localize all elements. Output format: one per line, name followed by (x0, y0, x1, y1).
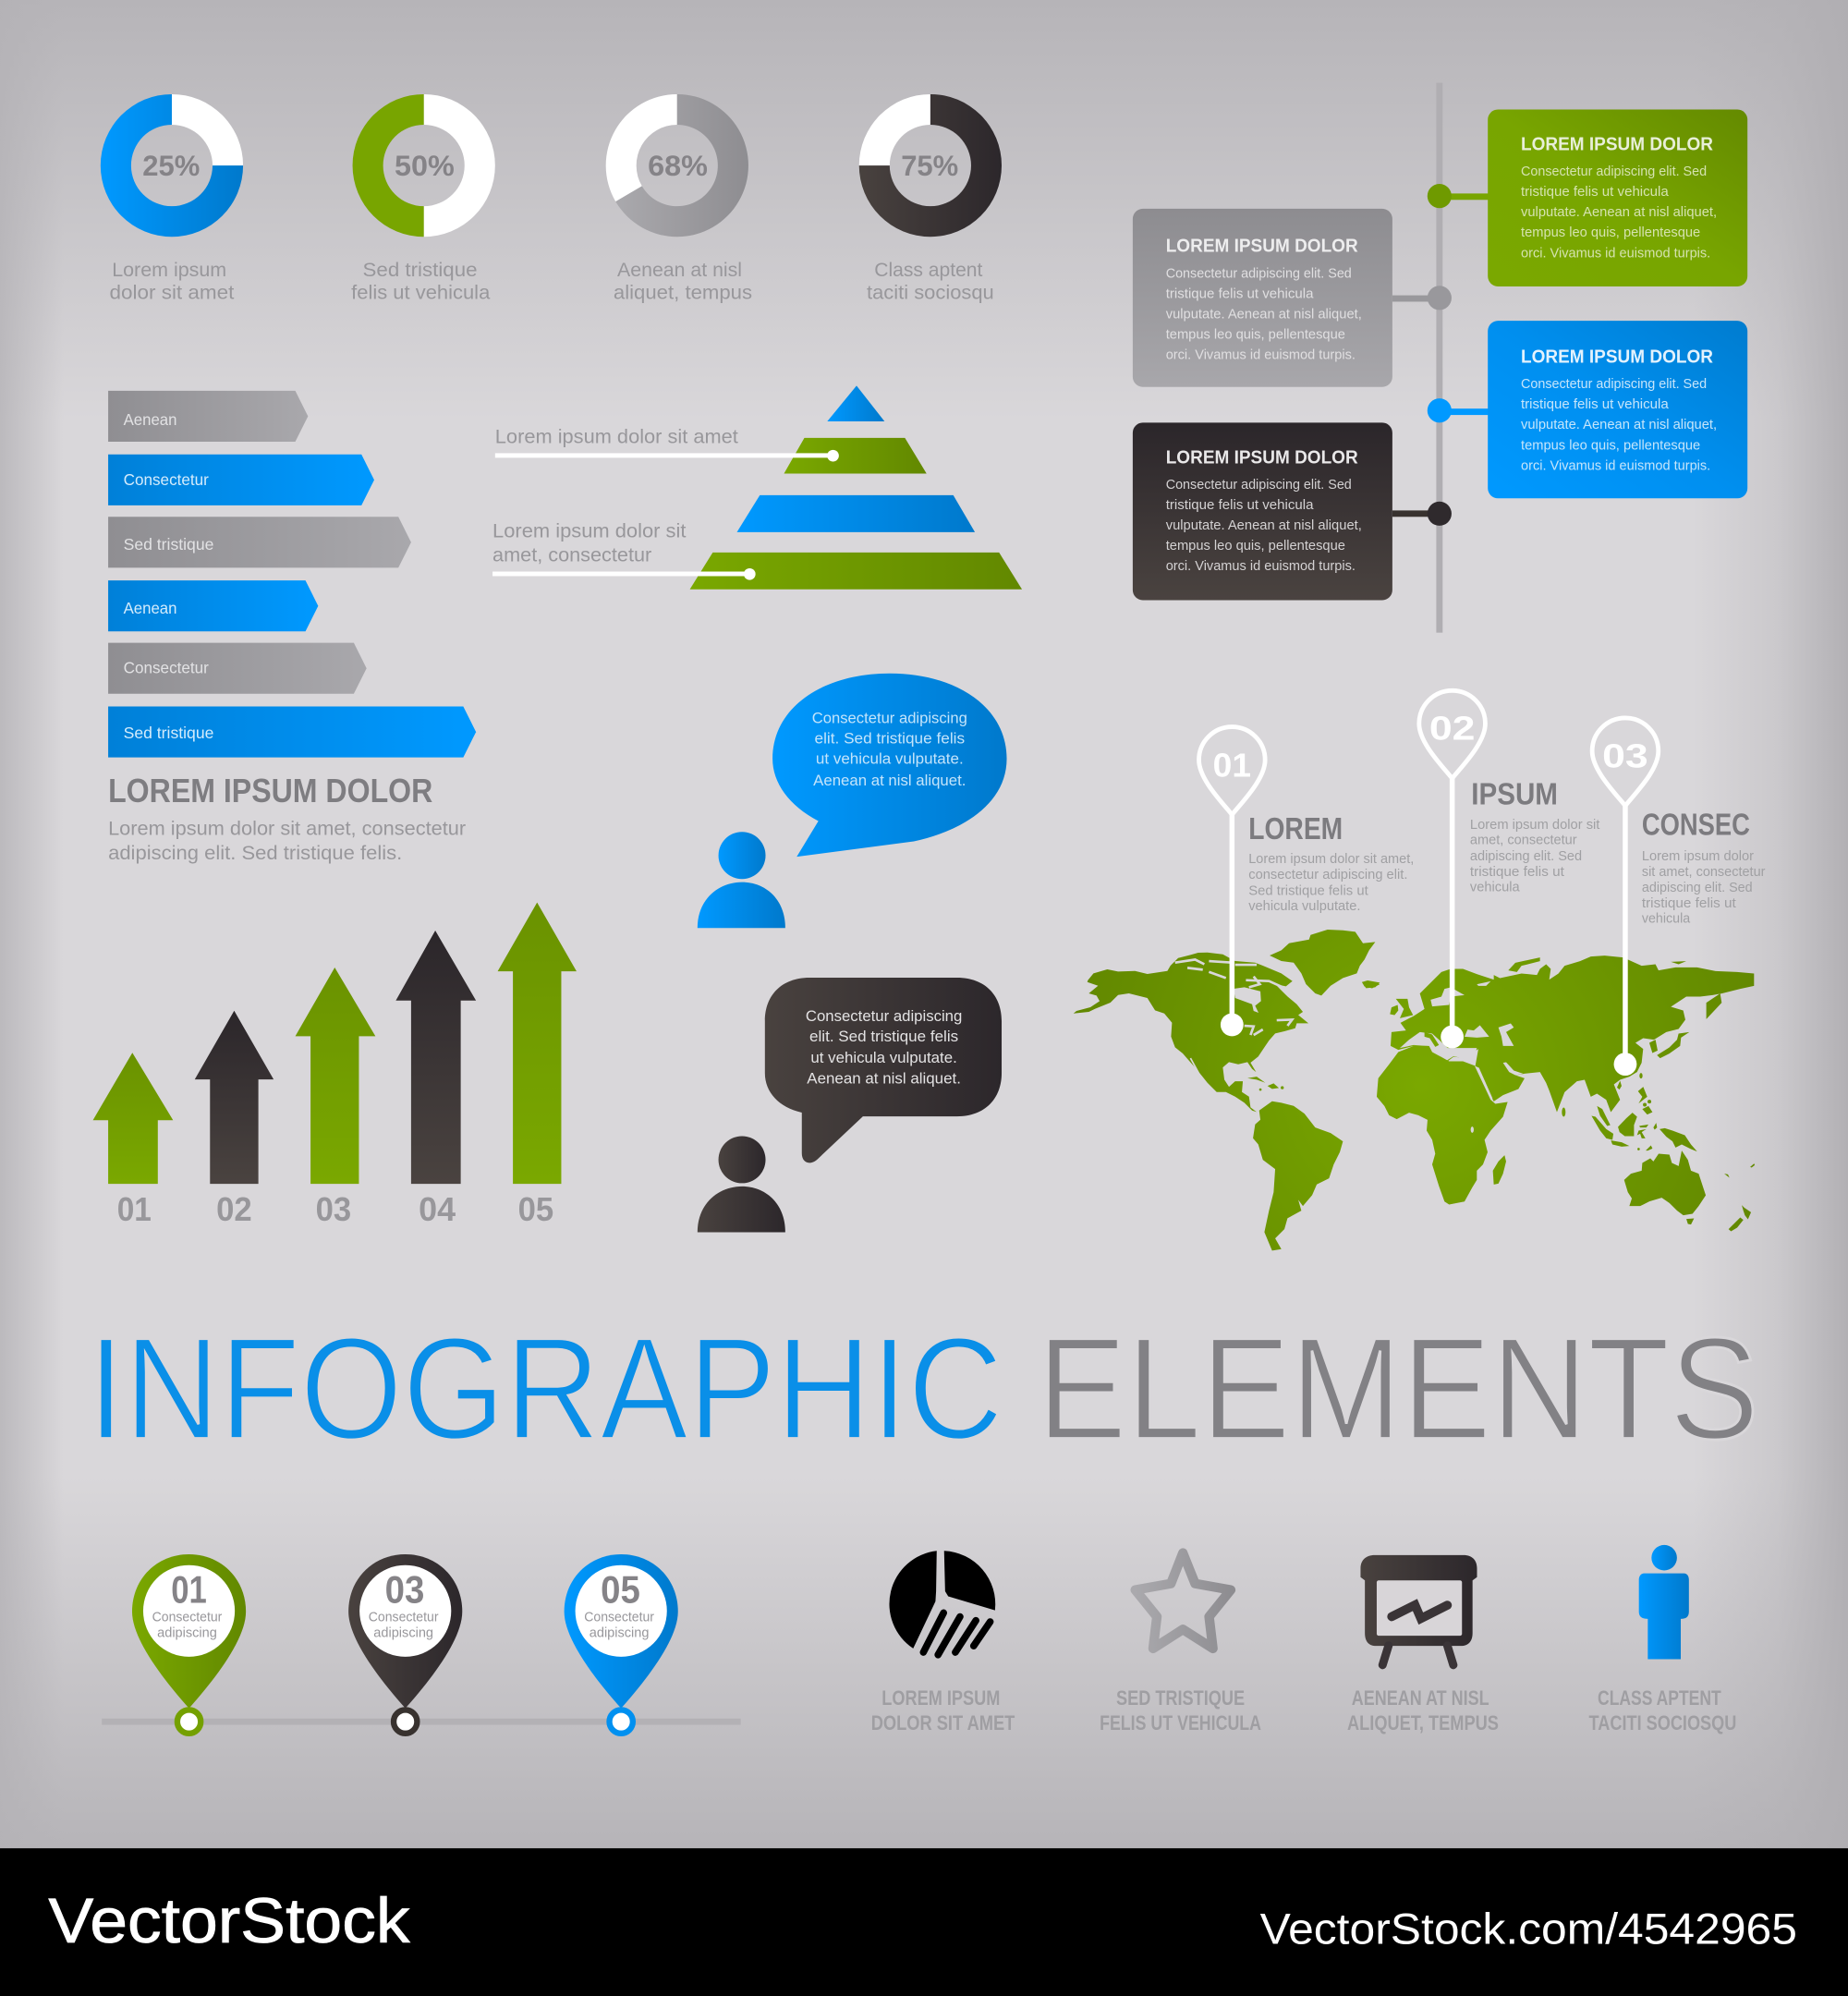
icon labels: ALIQUET, TEMPUS (1347, 1711, 1499, 1734)
pin 05: adipiscing (590, 1625, 649, 1641)
map text IPSUM (1470, 778, 1599, 895)
donut 25%: Lorem ipsum (112, 259, 226, 281)
pin 01: adipiscing (157, 1625, 217, 1641)
timeline box green: tristique felis ut vehicula (1521, 185, 1670, 200)
timeline box green (1428, 109, 1747, 286)
pin 03 (348, 1554, 462, 1734)
arrow 05 (498, 903, 577, 1184)
timeline box green: orci. Vivamus id euismod turpis. (1521, 246, 1710, 261)
panel: speech bubble blue: Consectetur adipiscing (812, 709, 967, 726)
timeline box gray: tristique felis ut vehicula (1166, 286, 1314, 301)
panel: speech bubble dark: ut vehicula vulputate. (810, 1049, 957, 1066)
pyramid callout 2: Lorem ipsum dolor sit (492, 519, 686, 542)
timeline box dark: tristique felis ut vehicula (1166, 498, 1314, 513)
pyramid callout 1 (495, 425, 839, 462)
panel: speech bubble dark: elit. Sed tristique felis (809, 1028, 958, 1045)
icon labels: DOLOR SIT AMET (871, 1711, 1015, 1734)
chart: pyramid (492, 385, 1022, 590)
title: INFOGRAPHIC (88, 1308, 1003, 1470)
donut 25%: dolor sit amet (109, 282, 235, 304)
timeline box blue: orci. Vivamus id euismod turpis. (1521, 458, 1710, 473)
panel: speech bubble dark: Consectetur adipiscing (806, 1007, 962, 1025)
map text CONSEC: sit amet, consectetur (1642, 865, 1766, 880)
donut 50%: felis ut vehicula (351, 282, 490, 304)
ribbon Consectetur gray (108, 643, 367, 694)
map text IPSUM: tristique felis ut (1470, 865, 1564, 880)
ribbon Aenean blue: Aenean (124, 599, 176, 617)
map text IPSUM: adipiscing elit. Sed (1470, 849, 1582, 864)
pin 05: Consectetur (584, 1609, 654, 1625)
icon labels: LOREM IPSUM (881, 1686, 1000, 1710)
timeline box green: LOREM IPSUM DOLOR (1521, 134, 1713, 155)
map pin 03 (1592, 718, 1659, 1076)
panel: speech bubble blue: Aenean at nisl aliquet. (813, 772, 966, 789)
ribbon Aenean gray: Aenean (124, 410, 176, 429)
donut 75%: Class aptent (874, 259, 982, 281)
ribbon Consectetur blue (108, 455, 374, 505)
pin 01: Consectetur (152, 1609, 222, 1625)
timeline box blue: vulputate. Aenean at nisl aliquet, (1521, 418, 1717, 432)
timeline box blue: LOREM IPSUM DOLOR (1521, 347, 1713, 368)
map: eurasia and africa (1362, 955, 1754, 1205)
pyramid callout 2 (492, 519, 756, 580)
timeline box dark: orci. Vivamus id euismod turpis. (1166, 559, 1356, 574)
donut 68%: 68% (648, 149, 708, 182)
donut 50%: Sed tristique (363, 259, 478, 281)
timeline box gray (1133, 209, 1452, 387)
donut 75%: taciti sociosqu (867, 282, 994, 304)
timeline box blue: tristique felis ut vehicula (1521, 397, 1670, 412)
map: americas and greenland (1074, 930, 1380, 1250)
map text IPSUM: IPSUM (1471, 778, 1558, 812)
pin 05 (565, 1554, 678, 1734)
map text LOREM (1248, 812, 1414, 914)
timeline box blue: Consectetur adipiscing elit. Sed (1521, 377, 1707, 392)
icon labels: TACITI SOCIOSQU (1589, 1711, 1736, 1734)
donut 50%: 50% (395, 149, 455, 182)
map text CONSEC: Lorem ipsum dolor (1642, 849, 1754, 864)
ribbon Sed tristique blue (108, 707, 476, 758)
map pin 02 (1419, 690, 1485, 1048)
icon: person figure (1639, 1545, 1689, 1660)
icon: person blue (698, 832, 785, 928)
arrow 04 (395, 931, 476, 1184)
pin 01 (132, 1554, 246, 1734)
donut 50% (351, 94, 495, 304)
icon labels: AENEAN AT NISL (1352, 1686, 1489, 1710)
ribbon Aenean gray (108, 391, 308, 442)
timeline box blue: tempus leo quis, pellentesque (1521, 438, 1700, 453)
arrow 02 (195, 1011, 274, 1184)
timeline box gray: Consectetur adipiscing elit. Sed (1166, 266, 1352, 281)
panel: speech bubble dark (765, 978, 1002, 1162)
timeline box green: tempus leo quis, pellentesque (1521, 225, 1700, 240)
icon: presentation board (1360, 1555, 1477, 1665)
map text LOREM: LOREM (1248, 812, 1343, 846)
icon labels: CLASS APTENT (1598, 1686, 1721, 1710)
map text IPSUM: amet, consectetur (1470, 833, 1577, 847)
title (88, 1308, 1759, 1470)
timeline box dark (1133, 422, 1452, 601)
panel: timeline with boxes (1133, 83, 1747, 633)
pin 03: 03 (385, 1568, 424, 1611)
map text CONSEC: vehicula (1642, 912, 1691, 927)
panel: ribbon bars (108, 391, 476, 758)
footer bar (0, 1848, 1848, 1996)
map text CONSEC (1642, 809, 1766, 927)
panel: donut charts (101, 94, 1002, 304)
arrow numbers: 02 (216, 1191, 252, 1228)
icon labels (871, 1686, 1736, 1734)
map text LOREM: vehicula vulputate. (1248, 899, 1360, 914)
arrow 03 (296, 968, 375, 1184)
title: ELEMENTS (1038, 1308, 1759, 1470)
timeline box dark: Consectetur adipiscing elit. Sed (1166, 478, 1352, 493)
icon: star (1136, 1553, 1231, 1649)
map pin 01: 01 (1213, 747, 1251, 784)
arrow numbers: 04 (419, 1191, 456, 1228)
map text LOREM: Sed tristique felis ut (1248, 883, 1368, 898)
timeline box green: vulputate. Aenean at nisl aliquet, (1521, 205, 1717, 220)
pin 03: Consectetur (369, 1609, 439, 1625)
text block: lorem ipsum dolor: adipiscing elit. Sed tristique felis. (108, 842, 402, 864)
text block: lorem ipsum dolor (108, 773, 466, 864)
donut 68%: aliquet, tempus (614, 282, 752, 304)
world map (1074, 930, 1755, 1250)
timeline box gray: vulputate. Aenean at nisl aliquet, (1166, 307, 1362, 322)
map text LOREM: Lorem ipsum dolor sit amet, (1248, 852, 1414, 867)
arrow numbers: 01 (117, 1191, 152, 1228)
timeline box dark: tempus leo quis, pellentesque (1166, 539, 1345, 554)
arrow 01 (93, 1053, 173, 1184)
footer bar: VectorStock.com/4542965 (1260, 1905, 1797, 1953)
map pin 01 (1199, 727, 1265, 1036)
ribbon Consectetur gray: Consectetur (124, 659, 209, 677)
text block: lorem ipsum dolor: Lorem ipsum dolor sit amet, consectetur (108, 818, 466, 840)
donut 68% (606, 94, 752, 304)
timeline box dark: LOREM IPSUM DOLOR (1166, 446, 1358, 468)
arrow numbers (117, 1191, 553, 1228)
donut 25%: 25% (142, 149, 200, 182)
donut 68%: Aenean at nisl (617, 259, 742, 281)
map text LOREM: consectetur adipiscing elit. (1248, 868, 1407, 882)
icon labels: FELIS UT VEHICULA (1100, 1711, 1261, 1734)
icon: pie chart (889, 1551, 995, 1655)
chart: rising arrows (93, 903, 577, 1228)
ribbon Sed tristique gray: Sed tristique (124, 535, 213, 554)
timeline box gray: tempus leo quis, pellentesque (1166, 327, 1345, 342)
timeline box green: Consectetur adipiscing elit. Sed (1521, 164, 1707, 179)
timeline box gray: orci. Vivamus id euismod turpis. (1166, 347, 1356, 362)
ribbon Sed tristique gray (108, 517, 411, 567)
map text CONSEC: tristique felis ut (1642, 896, 1736, 911)
pyramid callout 1: Lorem ipsum dolor sit amet (495, 425, 738, 447)
map text IPSUM: vehicula (1470, 880, 1521, 895)
panel: speech bubble blue (772, 674, 1007, 857)
ribbon Aenean blue (108, 580, 318, 631)
footer bar: VectorStock (48, 1885, 410, 1956)
pyramid callout 2: amet, consectetur (492, 543, 651, 566)
pin 01: 01 (171, 1568, 207, 1611)
arrow numbers: 03 (316, 1191, 351, 1228)
map pin 02: 02 (1429, 710, 1475, 747)
panel: bottom pins (102, 1554, 741, 1734)
map pin 03: 03 (1602, 738, 1648, 775)
ribbon Consectetur blue: Consectetur (124, 470, 209, 489)
panel: speech bubble blue: ut vehicula vulputate. (816, 750, 964, 768)
donut 75%: 75% (901, 149, 958, 182)
arrow numbers: 05 (518, 1191, 553, 1228)
icon: person dark (698, 1136, 785, 1232)
text block: lorem ipsum dolor: LOREM IPSUM DOLOR (108, 773, 432, 809)
donut 75% (859, 94, 1002, 304)
map text CONSEC: CONSEC (1642, 809, 1750, 843)
timeline box blue (1428, 321, 1747, 498)
pin 05: 05 (601, 1568, 640, 1611)
timeline box dark: vulputate. Aenean at nisl aliquet, (1166, 518, 1362, 533)
ribbon Sed tristique blue: Sed tristique (124, 724, 213, 742)
icon labels: SED TRISTIQUE (1116, 1686, 1245, 1710)
map text IPSUM: Lorem ipsum dolor sit (1470, 818, 1599, 833)
panel: speech bubble blue: elit. Sed tristique felis (815, 729, 965, 747)
panel: speech bubble dark: Aenean at nisl aliquet. (807, 1069, 961, 1087)
donut 25% (101, 94, 243, 304)
map text CONSEC: adipiscing elit. Sed (1642, 881, 1753, 895)
pin 03: adipiscing (373, 1625, 433, 1641)
map: southeast asia and oceania (1591, 1087, 1755, 1231)
timeline box gray: LOREM IPSUM DOLOR (1166, 236, 1358, 257)
